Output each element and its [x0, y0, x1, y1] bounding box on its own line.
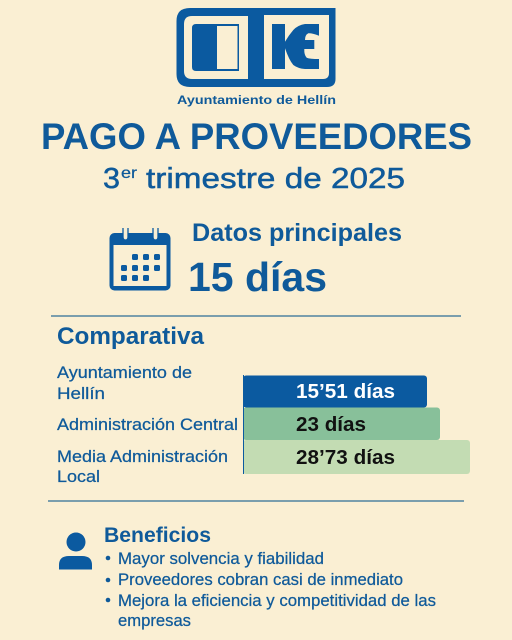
benefit 3: empresas	[118, 611, 191, 630]
logo: Ayuntamiento de Hellín	[176, 8, 336, 107]
bar: Ayuntamiento de Hellín	[243, 376, 427, 408]
label: Ayuntamiento de Hellín	[57, 363, 192, 403]
benefit 2: Proveedores cobran casi de inmediato	[118, 570, 403, 589]
bar: Media Administración Local	[243, 440, 470, 474]
bar: Administración Central	[243, 408, 440, 440]
label: Administración Central: Administración Central	[57, 415, 238, 434]
bar chart: comparativa	[57, 363, 470, 486]
icon: calendar	[110, 228, 170, 290]
value: 15'51 días: 15’51 días	[296, 381, 395, 403]
heading: Datos principales: Datos principales	[192, 219, 402, 247]
label: Media Administración Local: Local	[57, 467, 100, 486]
subtitle: er	[121, 165, 138, 182]
label: Ayuntamiento de Hellín: Hellín	[57, 384, 105, 403]
benefit 3: Mejora la eficiencia y competitividad de las	[118, 591, 436, 610]
icon: person	[59, 532, 92, 570]
label: Media Administración Local: Media Administración	[57, 447, 228, 466]
label: Media Administración Local	[57, 447, 228, 486]
main figure: 15 días: 15 días	[188, 254, 327, 300]
label: Ayuntamiento de Hellín: Ayuntamiento de	[57, 363, 192, 382]
heading: Comparativa: Comparativa	[57, 323, 205, 350]
logo: Ayuntamiento de Hellín: Ayuntamiento de Hellín	[177, 93, 336, 107]
subtitle: trimestre de 2025	[146, 163, 405, 195]
title: PAGO A PROVEEDORES	[41, 115, 472, 157]
value: 23 días: 23 días	[296, 414, 366, 436]
benefit 3	[106, 591, 436, 630]
benefit 1: Mayor solvencia y fiabilidad	[118, 549, 324, 568]
value: 28'73 días: 28’73 días	[296, 447, 395, 469]
subtitle: 3	[103, 163, 120, 195]
benefits list	[106, 549, 436, 630]
heading: Beneficios: Beneficios	[104, 524, 211, 547]
